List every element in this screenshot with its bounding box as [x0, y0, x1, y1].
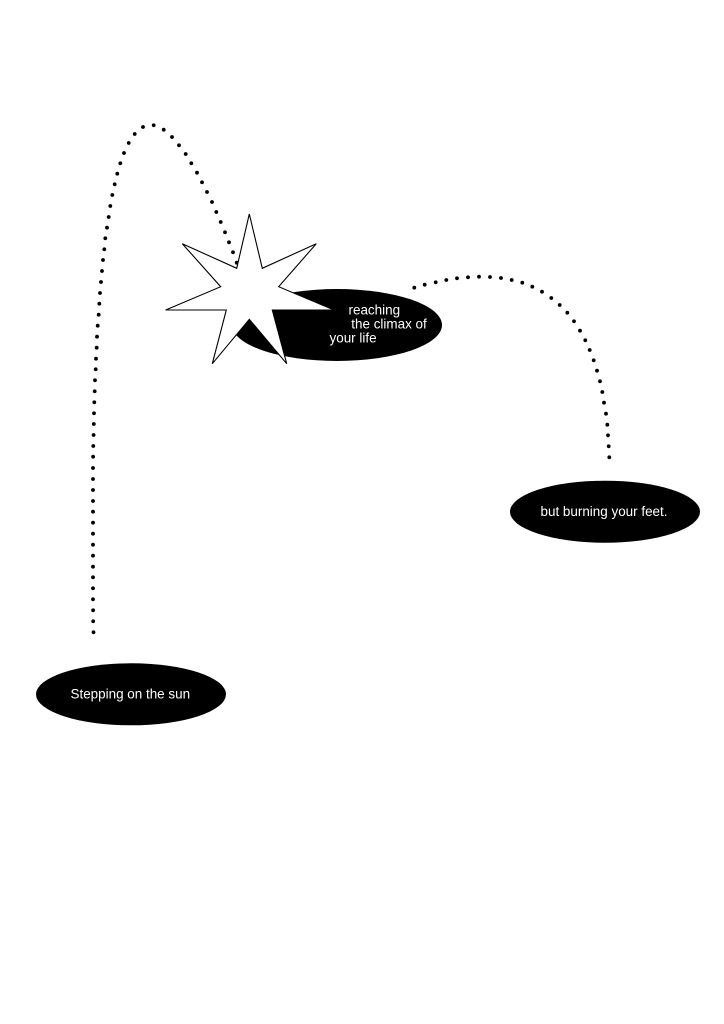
right ellipse with text: but burning your feet.: [510, 481, 700, 543]
middle ellipse with text: reaching the climax of your life: [232, 289, 442, 361]
dotted arc: from middle ellipse over to the right ellipse: [412, 275, 611, 459]
icon: white seven-pointed star burst: [166, 214, 334, 364]
bottom-left ellipse with text: Stepping on the sun: [36, 663, 226, 725]
dotted arc: from first ellipse up and over to the star: [91, 123, 239, 634]
right ellipse with text: but burning your feet.: but burning your feet.: [540, 504, 668, 519]
middle ellipse with text: reaching the climax of your life: your life: [330, 330, 377, 346]
bottom-left ellipse with text: Stepping on the sun: Stepping on the sun: [70, 686, 190, 702]
middle ellipse with text: reaching the climax of your life: reaching: [348, 302, 400, 318]
middle ellipse with text: reaching the climax of your life: the climax of: [351, 316, 427, 332]
